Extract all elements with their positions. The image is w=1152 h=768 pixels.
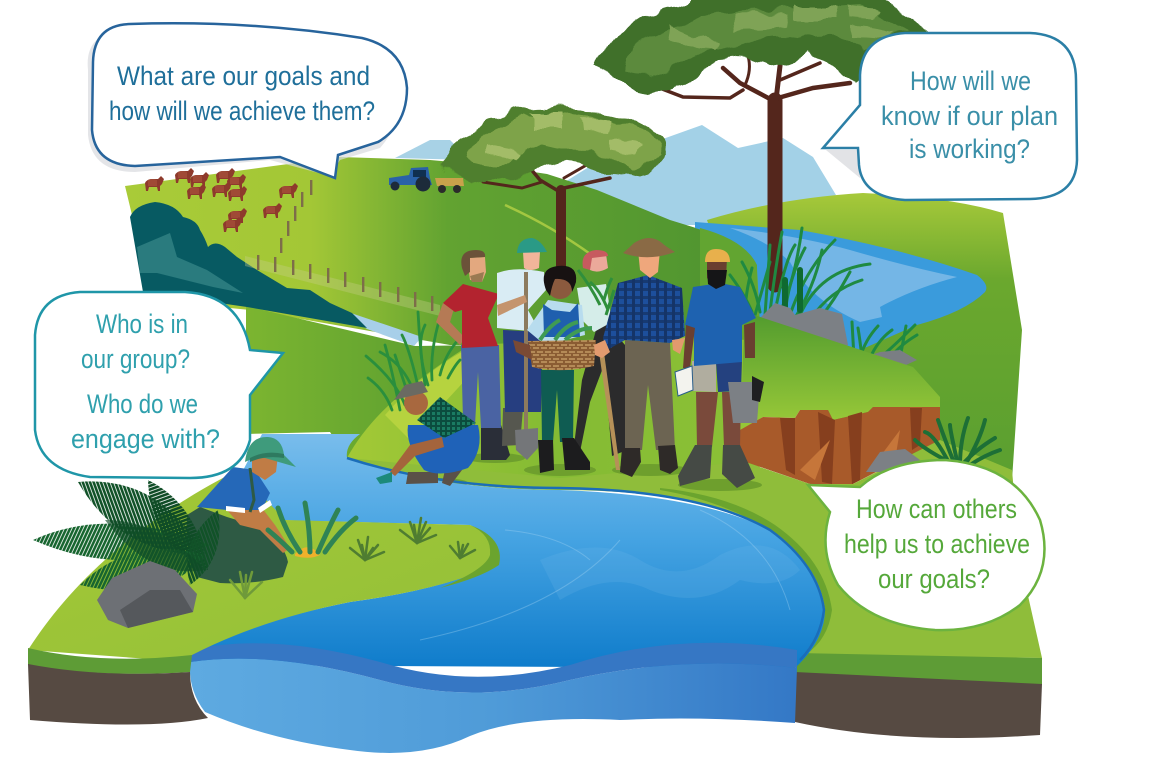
question text: Who is in (96, 309, 188, 339)
right hill (707, 193, 1022, 480)
question text: How can others (856, 494, 1017, 524)
question text: is working? (909, 134, 1030, 164)
question text: our goals? (878, 564, 990, 594)
blue tractor with trailer (389, 167, 464, 193)
distant mountains (395, 125, 836, 225)
upper right river (695, 222, 986, 350)
question text (844, 494, 1030, 594)
river front face (190, 643, 797, 753)
person: man in wide hat and plaid shirt (594, 238, 685, 477)
foreground right bank (347, 440, 1042, 738)
question text: our group? (81, 344, 190, 374)
kneeling woman planting (187, 437, 320, 583)
question text: What are our goals and (117, 61, 370, 91)
foreground left bank (28, 470, 500, 725)
question text: how will we achieve them? (109, 96, 375, 126)
grey rock by cliff (866, 449, 920, 472)
reeds behind right bank (730, 228, 917, 358)
person: bearded man in yellow cap with bucket (675, 249, 764, 488)
question text: engage with? (71, 424, 220, 454)
question text (109, 61, 375, 126)
question text: know if our plan (881, 101, 1058, 131)
question text (881, 66, 1058, 164)
eroded brown cliff (740, 407, 940, 484)
large tree (597, 0, 927, 285)
dark forest (130, 202, 367, 328)
reeds behind crouching figure (366, 312, 460, 410)
person: child with afro holding basket (513, 266, 596, 473)
person: man with green cap and spade (497, 238, 547, 460)
speech bubble: help from others (808, 460, 1044, 630)
upper left hill with pasture (125, 157, 760, 345)
middle left hill (246, 306, 490, 458)
small tree (440, 107, 667, 270)
person: man in red shirt (436, 250, 510, 460)
speech bubble: monitoring (823, 33, 1077, 200)
speech bubble: group and engagement (35, 292, 283, 478)
small hump left of river (700, 228, 757, 320)
central lawn (347, 312, 940, 490)
person: crouching figure reaching into water (376, 381, 480, 486)
question text: help us to achieve (844, 529, 1030, 559)
fence line (245, 180, 440, 316)
small stream under forest (333, 307, 422, 346)
question text: How will we (910, 66, 1031, 96)
speech bubble: goals (88, 23, 407, 178)
grey boulder (97, 561, 197, 628)
question text: Who do we (87, 389, 198, 419)
cattle herd (145, 168, 298, 232)
planted grasses on the island (230, 503, 475, 598)
foreground right reeds (915, 418, 1000, 465)
main river (190, 434, 825, 668)
person: woman with pink hair and reeds (574, 250, 627, 456)
question text (71, 309, 220, 454)
rocks on right bank (760, 303, 917, 370)
palm fronds (33, 480, 219, 591)
